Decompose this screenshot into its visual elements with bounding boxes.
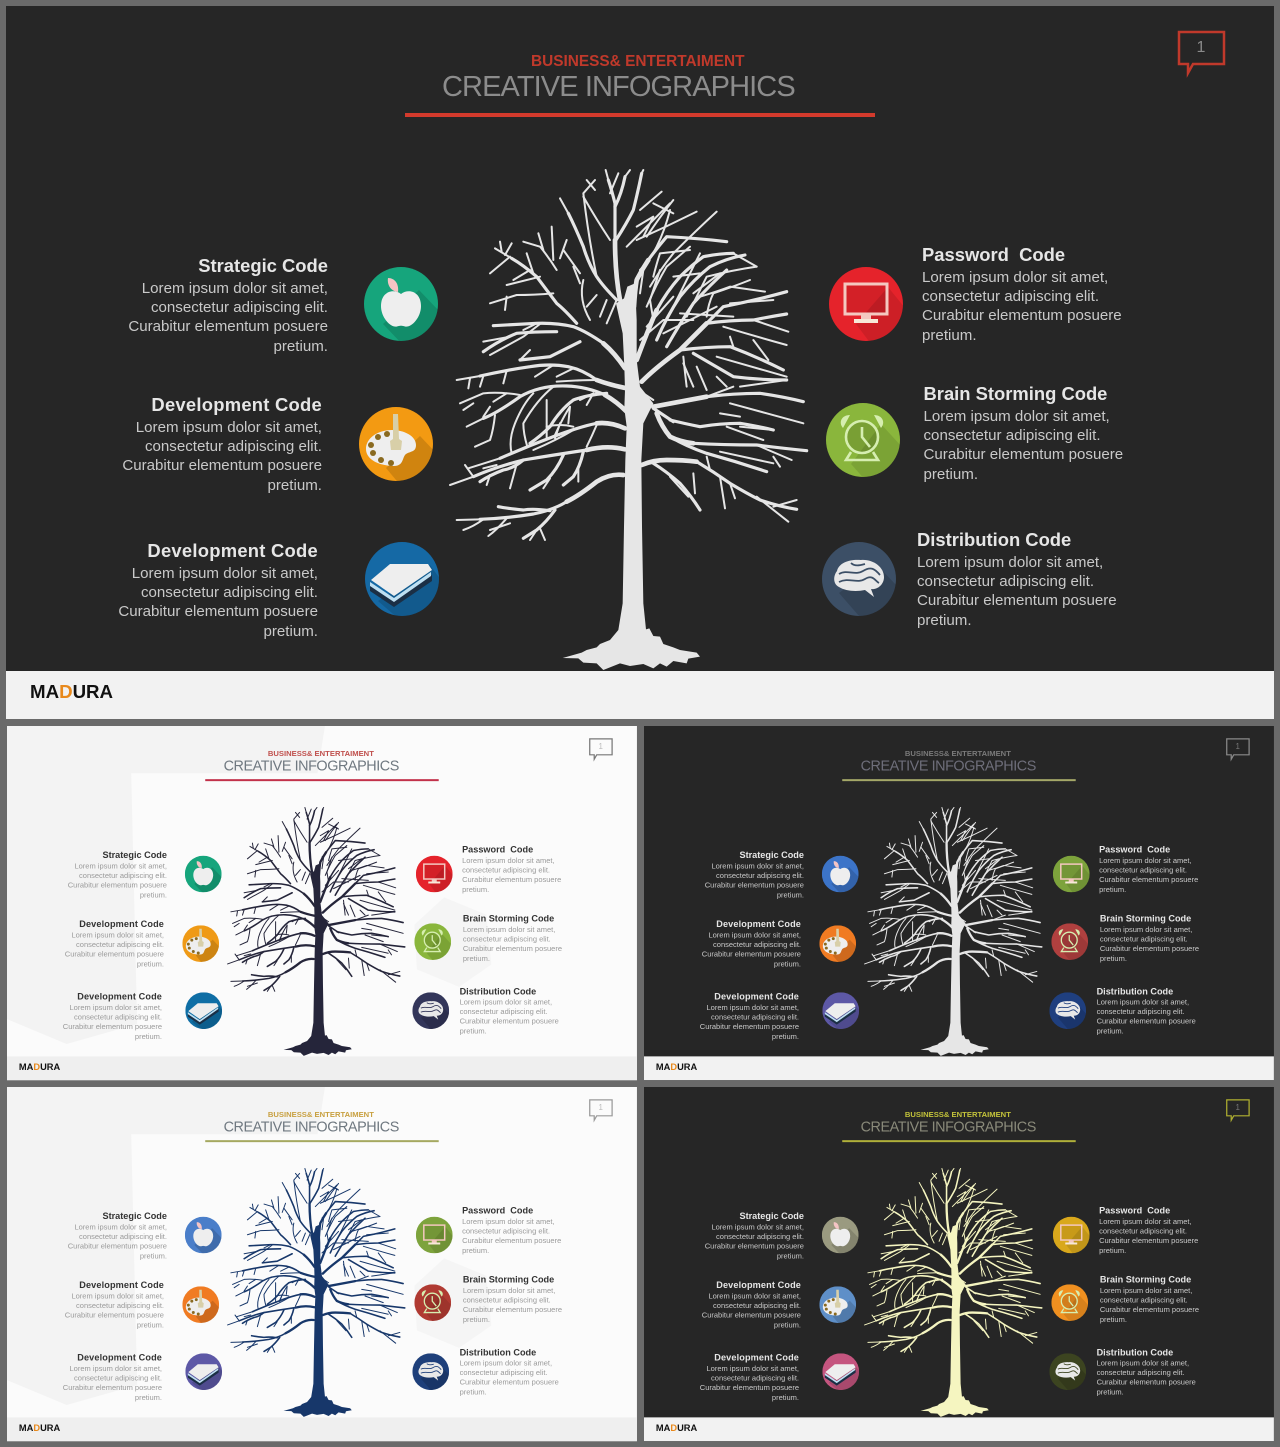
text: brain storming code: consectetur adipiscing elit.: [924, 427, 1101, 444]
text: brain storming code: pretium.: [463, 1315, 490, 1324]
text: development code 2: Curabitur elementum posuere: [700, 1023, 799, 1031]
footer bar with logo: [7, 1417, 637, 1441]
text: development code: Development Code: [151, 394, 322, 415]
text: development code: pretium.: [137, 1321, 164, 1329]
icon: book: [185, 1353, 222, 1390]
text: distribution code: Lorem ipsum dolor sit amet,: [1097, 998, 1189, 1006]
text: strategic code: consectetur adipiscing elit.: [79, 1233, 167, 1241]
tree illustration: [860, 1164, 1048, 1422]
text: brain storming code: [463, 1274, 607, 1324]
text: development code 2: Curabitur elementum posuere: [118, 603, 318, 620]
text: brain storming code: Lorem ipsum dolor sit amet,: [924, 408, 1110, 424]
text: strategic code: Strategic Code: [739, 1211, 804, 1221]
title: CREATIVE INFOGRAPHICS: [224, 1119, 399, 1135]
icon: palette: [359, 407, 433, 481]
text: brain storming code: Curabitur elementum posuere: [1100, 1306, 1199, 1314]
icon: palette: [820, 925, 856, 962]
text: development code: [657, 1280, 801, 1329]
footer bar with logo: [7, 1056, 637, 1080]
text: password code: consectetur adipiscing elit.: [462, 1227, 550, 1235]
text: development code: pretium.: [774, 1321, 801, 1329]
text: distribution code: consectetur adipiscing elit.: [917, 573, 1094, 590]
icon: comment bubble: [1178, 30, 1226, 78]
text: development code 2: pretium.: [263, 623, 318, 640]
panel: main dark slide: [6, 6, 1274, 719]
text: development code: Curabitur elementum posuere: [702, 1311, 801, 1320]
title: CREATIVE INFOGRAPHICS: [224, 758, 399, 774]
text: brain storming code: Curabitur elementum posuere: [463, 1306, 562, 1314]
footer bar with logo: [6, 671, 1274, 719]
icon: monitor: [416, 1217, 453, 1253]
text: strategic code: Strategic Code: [198, 255, 328, 276]
text: development code: consectetur adipiscing elit.: [76, 1302, 164, 1310]
text: strategic code: [705, 850, 804, 899]
title underline: [205, 779, 439, 781]
text: development code 2: pretium.: [135, 1032, 162, 1041]
text: password code: consectetur adipiscing elit.: [1099, 866, 1187, 874]
text: development code 2: pretium.: [135, 1393, 162, 1402]
text: brain storming code: Lorem ipsum dolor sit amet,: [1100, 925, 1192, 934]
text: development code 2: Curabitur elementum posuere: [700, 1384, 799, 1392]
text: distribution code: pretium.: [917, 612, 972, 629]
text: strategic code: pretium.: [777, 1252, 804, 1260]
text: strategic code: pretium.: [273, 338, 328, 355]
text: password code: Curabitur elementum posuere: [462, 876, 561, 884]
text: password code: [922, 244, 1122, 344]
icon: palette: [182, 925, 219, 962]
text: password code: Password Code: [1099, 844, 1170, 855]
text: distribution code: consectetur adipiscing elit.: [460, 1008, 548, 1016]
text: brain storming code: pretium.: [463, 954, 490, 963]
icon: palette: [819, 1286, 856, 1323]
text: brain storming code: Lorem ipsum dolor sit amet,: [463, 1286, 555, 1295]
text: development code: Development Code: [79, 919, 164, 929]
text: strategic code: [68, 850, 167, 899]
text: development code 2: [700, 991, 799, 1041]
text: brain storming code: Brain Storming Code: [463, 913, 554, 924]
text: development code: Curabitur elementum posuere: [122, 457, 322, 474]
text: strategic code: pretium.: [140, 891, 167, 899]
text: brain storming code: [1100, 913, 1244, 963]
text: development code: Development Code: [716, 919, 801, 929]
text: distribution code: Distribution Code: [1097, 1347, 1173, 1357]
text: strategic code: Curabitur elementum posuere: [68, 1242, 167, 1251]
text: development code 2: Lorem ipsum dolor sit amet,: [706, 1003, 799, 1012]
text: brain storming code: consectetur adipiscing elit.: [463, 1296, 551, 1305]
icon: monitor: [1053, 1217, 1090, 1253]
icon: clock: [826, 403, 900, 477]
text: password code: [1099, 1205, 1243, 1255]
text: distribution code: Distribution Code: [1097, 986, 1173, 996]
text: brain storming code: Curabitur elementum posuere: [463, 945, 562, 953]
text: development code: [702, 919, 801, 968]
text: distribution code: Distribution Code: [460, 1347, 536, 1357]
panel: light slide, black tree: [7, 726, 637, 1080]
text: password code: pretium.: [922, 327, 977, 344]
text: password code: pretium.: [462, 885, 489, 894]
text: strategic code: Curabitur elementum posuere: [705, 1242, 804, 1251]
text: brain storming code: consectetur adipiscing elit.: [1100, 1296, 1188, 1305]
footer bar with logo: MADURA: [19, 1422, 60, 1433]
text: brain storming code: Brain Storming Code: [1100, 913, 1191, 924]
text: distribution code: pretium.: [1097, 1388, 1124, 1396]
text: strategic code: Strategic Code: [739, 850, 804, 860]
icon: clock: [1052, 923, 1088, 960]
text: distribution code: pretium.: [1097, 1027, 1124, 1035]
subtitle: BUSINESS& ENTERTAIMENT: [531, 53, 744, 70]
text: strategic code: consectetur adipiscing elit.: [151, 299, 328, 316]
text: strategic code: consectetur adipiscing elit.: [79, 872, 167, 880]
tree illustration: [449, 169, 808, 670]
text: distribution code: [460, 986, 559, 1035]
text: brain storming code: Lorem ipsum dolor sit amet,: [463, 925, 555, 934]
text: password code: pretium.: [1099, 885, 1126, 894]
icon: brain: [1050, 992, 1086, 1029]
text: development code 2: Development Code: [714, 991, 799, 1002]
icon: book: [186, 992, 222, 1029]
text: development code: pretium.: [774, 960, 801, 968]
icon: brain: [822, 542, 896, 616]
icon: clock: [414, 923, 451, 960]
text: development code: [122, 394, 322, 494]
icon: brain: [412, 992, 449, 1029]
icon: comment bubble: [587, 1097, 615, 1125]
title underline: [842, 779, 1076, 781]
text: password code: Password Code: [922, 244, 1065, 265]
text: distribution code: Lorem ipsum dolor sit amet,: [460, 1359, 552, 1367]
text: password code: Curabitur elementum posuere: [922, 307, 1122, 324]
text: development code 2: consectetur adipiscing elit.: [74, 1013, 162, 1022]
icon: comment bubble: [589, 738, 613, 762]
text: password code: pretium.: [1099, 1246, 1126, 1255]
text: development code 2: [655, 1352, 799, 1402]
text: development code 2: Development Code: [147, 540, 318, 561]
icon: comment bubble: [1226, 738, 1250, 762]
tree illustration: [864, 807, 1042, 1056]
text: brain storming code: Brain Storming Code: [1100, 1274, 1191, 1285]
text: strategic code: Lorem ipsum dolor sit amet,: [711, 1223, 804, 1231]
text: strategic code: Curabitur elementum posuere: [705, 881, 804, 890]
text: development code: Lorem ipsum dolor sit amet,: [71, 1292, 164, 1300]
text: development code: consectetur adipiscing elit.: [145, 438, 322, 455]
icon: comment bubble: 1: [598, 1103, 603, 1112]
icon: monitor: [829, 267, 903, 341]
text: development code 2: consectetur adipiscing elit.: [74, 1374, 162, 1383]
tree illustration: [223, 1164, 411, 1422]
panel: light slide, navy tree: [7, 1087, 637, 1441]
text: brain storming code: [1100, 1274, 1244, 1324]
title underline: [405, 113, 875, 117]
text: distribution code: consectetur adipiscing elit.: [1097, 1008, 1185, 1016]
subtitle: BUSINESS& ENTERTAIMENT: [268, 749, 374, 758]
text: password code: Password Code: [1099, 1205, 1170, 1216]
text: distribution code: [1097, 986, 1241, 1035]
text: password code: Lorem ipsum dolor sit amet,: [1099, 1217, 1192, 1226]
text: distribution code: Lorem ipsum dolor sit amet,: [1097, 1359, 1189, 1367]
text: strategic code: consectetur adipiscing elit.: [716, 1233, 804, 1241]
text: brain storming code: Brain Storming Code: [463, 1274, 554, 1285]
text: distribution code: Curabitur elementum posuere: [460, 1017, 559, 1026]
text: development code: Development Code: [716, 1280, 801, 1290]
text: strategic code: consectetur adipiscing elit.: [716, 872, 804, 880]
text: strategic code: Curabitur elementum posuere: [128, 318, 328, 335]
text: brain storming code: Lorem ipsum dolor sit amet,: [1100, 1286, 1192, 1295]
text: brain storming code: [924, 383, 1123, 483]
text: brain storming code: [463, 913, 562, 963]
text: development code 2: Curabitur elementum posuere: [63, 1384, 162, 1392]
icon: apple: [364, 267, 438, 341]
text: development code: Lorem ipsum dolor sit amet,: [71, 931, 164, 939]
text: development code 2: consectetur adipiscing elit.: [711, 1013, 799, 1022]
text: password code: consectetur adipiscing elit.: [1099, 1227, 1187, 1235]
icon: brain: [412, 1353, 449, 1390]
icon: monitor: [416, 856, 452, 892]
text: password code: [462, 844, 561, 894]
icon: book: [365, 542, 439, 616]
text: distribution code: Curabitur elementum posuere: [917, 592, 1117, 609]
footer bar with logo: [644, 1417, 1274, 1441]
icon: monitor: [1053, 856, 1090, 892]
text: distribution code: [460, 1347, 604, 1396]
title: CREATIVE INFOGRAPHICS: [861, 1119, 1036, 1135]
text: development code: Curabitur elementum posuere: [65, 950, 164, 959]
text: strategic code: Lorem ipsum dolor sit amet,: [142, 280, 328, 296]
text: development code 2: [118, 540, 318, 640]
text: distribution code: Curabitur elementum posuere: [460, 1378, 559, 1387]
icon: brain: [1049, 1353, 1086, 1390]
icon: palette: [182, 1286, 219, 1323]
text: development code 2: [63, 991, 162, 1041]
text: development code: consectetur adipiscing elit.: [713, 941, 801, 949]
text: brain storming code: pretium.: [1100, 1315, 1127, 1324]
text: distribution code: pretium.: [460, 1388, 487, 1396]
text: distribution code: [1097, 1347, 1241, 1396]
text: password code: Password Code: [462, 1205, 533, 1216]
text: distribution code: Distribution Code: [460, 986, 536, 996]
text: brain storming code: Curabitur elementum posuere: [924, 446, 1123, 463]
footer bar with logo: [644, 1056, 1274, 1080]
text: brain storming code: pretium.: [924, 466, 978, 483]
text: brain storming code: Brain Storming Code: [924, 383, 1107, 404]
title underline: [842, 1140, 1076, 1142]
title underline: [205, 1140, 439, 1142]
icon: comment bubble: [1224, 1097, 1252, 1125]
text: strategic code: pretium.: [777, 891, 804, 899]
text: distribution code: consectetur adipiscing elit.: [460, 1369, 548, 1377]
tree illustration: [227, 807, 406, 1056]
text: brain storming code: Curabitur elementum posuere: [1100, 945, 1199, 953]
text: brain storming code: consectetur adipiscing elit.: [1100, 935, 1188, 944]
text: development code: consectetur adipiscing elit.: [76, 941, 164, 949]
text: strategic code: Strategic Code: [102, 1211, 167, 1221]
text: password code: Curabitur elementum posuere: [462, 1237, 561, 1245]
icon: book: [822, 1353, 859, 1390]
text: password code: [462, 1205, 606, 1255]
text: development code 2: Lorem ipsum dolor sit amet,: [69, 1003, 162, 1012]
panel: dark slide, white tree: [644, 726, 1274, 1080]
text: strategic code: [128, 255, 328, 355]
text: development code: consectetur adipiscing elit.: [713, 1302, 801, 1310]
text: strategic code: Lorem ipsum dolor sit amet,: [711, 862, 804, 870]
footer bar with logo: MADURA: [19, 1061, 60, 1072]
text: strategic code: Strategic Code: [102, 850, 167, 860]
footer bar with logo: MADURA: [30, 681, 113, 702]
text: password code: Lorem ipsum dolor sit amet,: [462, 1217, 555, 1226]
icon: clock: [414, 1284, 451, 1321]
text: development code: Development Code: [79, 1280, 164, 1290]
icon: clock: [1051, 1284, 1088, 1321]
text: development code 2: Lorem ipsum dolor sit amet,: [69, 1364, 162, 1373]
text: password code: consectetur adipiscing elit.: [462, 866, 550, 874]
text: development code 2: Development Code: [77, 1352, 162, 1363]
text: password code: Lorem ipsum dolor sit amet,: [1099, 856, 1192, 865]
text: development code 2: Development Code: [77, 991, 162, 1002]
icon: book: [822, 992, 859, 1029]
subtitle: BUSINESS& ENTERTAIMENT: [905, 749, 1011, 758]
title: CREATIVE INFOGRAPHICS: [442, 71, 795, 103]
subtitle: BUSINESS& ENTERTAIMENT: [268, 1110, 374, 1119]
text: distribution code: Lorem ipsum dolor sit amet,: [917, 554, 1103, 570]
text: development code: pretium.: [137, 960, 164, 968]
text: development code: Curabitur elementum posuere: [65, 1311, 164, 1320]
text: development code 2: Lorem ipsum dolor sit amet,: [132, 564, 318, 582]
text: development code: [20, 1280, 164, 1329]
text: development code: pretium.: [267, 477, 322, 494]
text: strategic code: Lorem ipsum dolor sit amet,: [74, 862, 167, 870]
text: strategic code: [660, 1211, 804, 1260]
text: password code: Lorem ipsum dolor sit amet,: [462, 856, 555, 865]
text: distribution code: Curabitur elementum posuere: [1097, 1017, 1196, 1026]
text: development code 2: Development Code: [714, 1352, 799, 1363]
text: password code: consectetur adipiscing elit.: [922, 288, 1099, 305]
text: distribution code: Lorem ipsum dolor sit amet,: [460, 998, 552, 1006]
icon: apple: [822, 856, 858, 892]
icon: comment bubble: 1: [1235, 742, 1240, 751]
text: development code 2: pretium.: [772, 1032, 799, 1041]
text: brain storming code: pretium.: [1100, 954, 1127, 963]
text: password code: [1099, 844, 1198, 894]
text: password code: Curabitur elementum posuere: [1099, 1237, 1198, 1245]
icon: comment bubble: 1: [1235, 1103, 1240, 1112]
text: distribution code: pretium.: [460, 1027, 487, 1035]
icon: apple: [185, 856, 222, 892]
text: development code 2: [18, 1352, 162, 1402]
text: password code: Password Code: [462, 844, 533, 855]
panel: dark slide, cream tree: [644, 1087, 1274, 1441]
footer bar with logo: MADURA: [656, 1061, 697, 1072]
text: strategic code: [23, 1211, 167, 1260]
text: development code: Lorem ipsum dolor sit amet,: [708, 931, 801, 939]
subtitle: BUSINESS& ENTERTAIMENT: [905, 1110, 1011, 1119]
title: CREATIVE INFOGRAPHICS: [861, 758, 1036, 774]
text: development code: Curabitur elementum posuere: [702, 950, 801, 959]
icon: apple: [822, 1217, 859, 1253]
text: development code: Lorem ipsum dolor sit amet,: [708, 1292, 801, 1300]
text: development code 2: pretium.: [772, 1393, 799, 1402]
text: distribution code: Distribution Code: [917, 529, 1071, 550]
text: distribution code: Curabitur elementum posuere: [1097, 1378, 1196, 1387]
text: development code 2: consectetur adipiscing elit.: [141, 584, 318, 601]
text: development code 2: consectetur adipiscing elit.: [711, 1374, 799, 1383]
text: password code: pretium.: [462, 1246, 489, 1255]
text: development code: Lorem ipsum dolor sit amet,: [136, 418, 322, 436]
text: development code 2: Lorem ipsum dolor sit amet,: [706, 1364, 799, 1373]
text: brain storming code: consectetur adipiscing elit.: [463, 935, 551, 944]
text: password code: Curabitur elementum posuere: [1099, 876, 1198, 884]
text: development code: [65, 919, 164, 968]
icon: apple: [185, 1217, 222, 1253]
text: strategic code: Curabitur elementum posuere: [68, 881, 167, 890]
footer bar with logo: MADURA: [656, 1422, 697, 1433]
icon: comment bubble: 1: [1197, 39, 1206, 56]
text: development code 2: Curabitur elementum posuere: [63, 1023, 162, 1031]
text: strategic code: pretium.: [140, 1252, 167, 1260]
text: password code: Lorem ipsum dolor sit amet,: [922, 268, 1108, 286]
icon: comment bubble: 1: [598, 742, 603, 751]
text: distribution code: [917, 529, 1117, 629]
text: strategic code: Lorem ipsum dolor sit amet,: [74, 1223, 167, 1231]
text: distribution code: consectetur adipiscing elit.: [1097, 1369, 1185, 1377]
